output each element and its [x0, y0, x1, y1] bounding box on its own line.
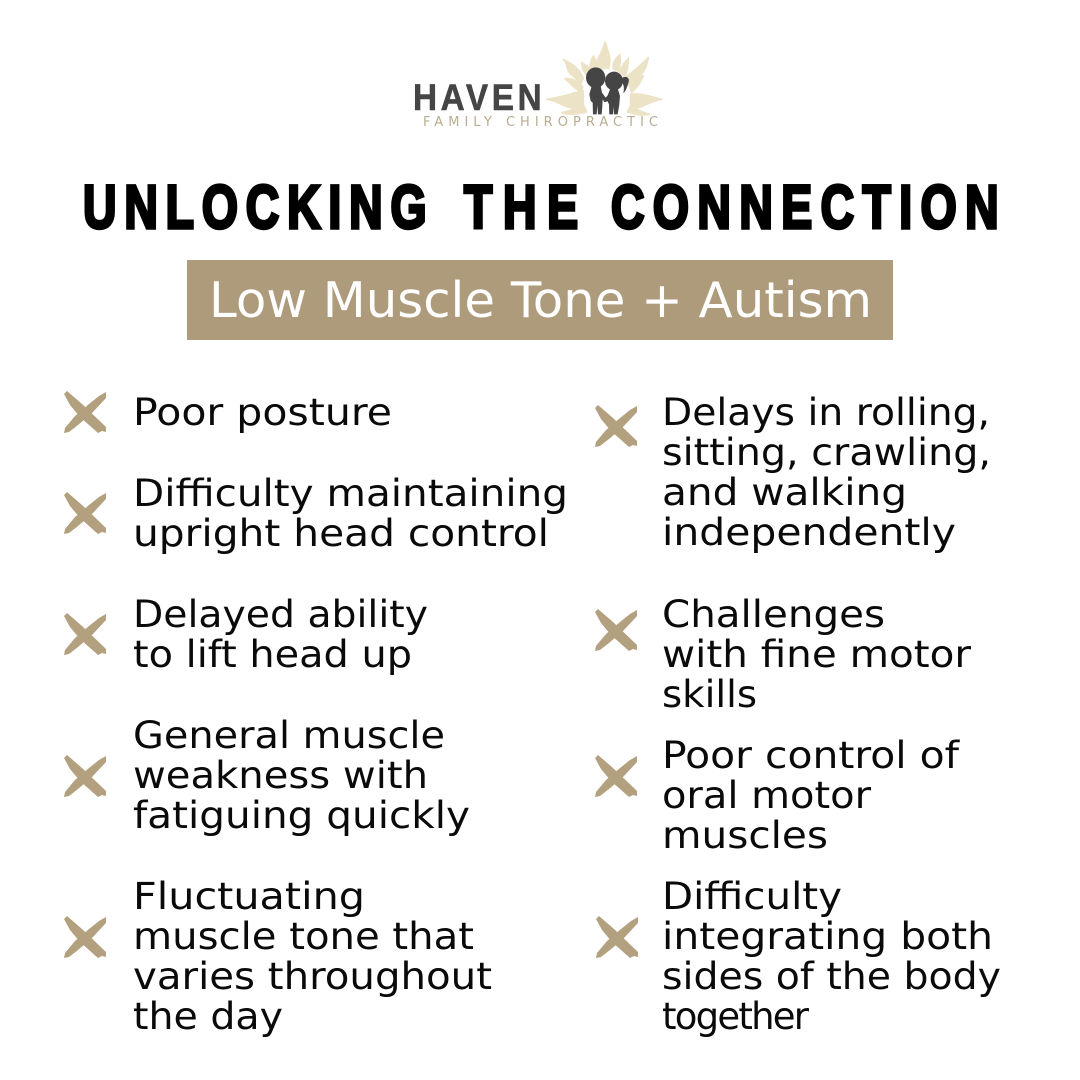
title: THE	[464, 174, 578, 242]
item: motor delays: independently	[662, 511, 956, 554]
icon: boy silhouette	[586, 67, 608, 114]
item: oral motor: oral motor	[662, 774, 872, 817]
subtitle banner	[187, 260, 893, 340]
icon: sun rays	[547, 42, 662, 115]
item: fluctuating tone: varies throughout	[133, 955, 492, 998]
item: muscle weakness: fatiguing quickly	[133, 794, 470, 837]
logo wordmark: HAVEN	[413, 77, 542, 118]
item: head control: upright head control	[133, 512, 549, 555]
item: fluctuating tone	[64, 875, 492, 1038]
item: fine motor: Challenges	[662, 593, 885, 636]
item: fine motor: skills	[662, 673, 757, 716]
item: muscle weakness: weakness with	[133, 754, 428, 797]
item: motor delays: and walking	[662, 471, 907, 514]
item: bilateral integration: integrating both	[662, 915, 993, 958]
item: poor posture: Poor posture	[133, 391, 392, 434]
item: head control: Difficulty maintaining	[133, 472, 568, 515]
item: bilateral integration: Difficulty	[662, 875, 842, 918]
item: lift head	[64, 593, 428, 676]
item: motor delays	[595, 391, 991, 554]
item: oral motor	[595, 734, 960, 857]
panel: right column list	[595, 391, 1001, 1038]
item: lift head: Delayed ability	[133, 593, 428, 636]
subtitle banner: Low Muscle Tone + Autism	[209, 272, 872, 329]
panel: left column list	[64, 391, 568, 1038]
item: motor delays: Delays in rolling,	[662, 391, 990, 434]
item: fluctuating tone: muscle tone that	[133, 915, 474, 958]
item: fine motor	[595, 593, 972, 716]
item: oral motor: muscles	[662, 814, 828, 857]
icon: girl silhouette	[603, 72, 629, 114]
item: bilateral integration: sides of the body	[662, 955, 1001, 998]
title: CONNECTION	[611, 174, 999, 242]
item: muscle weakness	[64, 714, 470, 837]
title: UNLOCKING	[83, 174, 427, 242]
item: oral motor: Poor control of	[662, 734, 960, 777]
title	[83, 174, 999, 242]
item: bilateral integration	[596, 875, 1001, 1038]
item: muscle weakness: General muscle	[133, 714, 445, 757]
item: bilateral integration: together	[662, 995, 810, 1038]
item: fine motor: with fine motor	[662, 633, 972, 676]
item: fluctuating tone: Fluctuating	[133, 875, 365, 918]
logo tagline: FAMILY CHIROPRACTIC	[423, 115, 658, 130]
item: motor delays: sitting, crawling,	[662, 431, 991, 474]
item: fluctuating tone: the day	[133, 995, 283, 1038]
item: head control	[64, 472, 568, 555]
logo	[413, 42, 662, 130]
item: lift head: to lift head up	[133, 633, 412, 676]
